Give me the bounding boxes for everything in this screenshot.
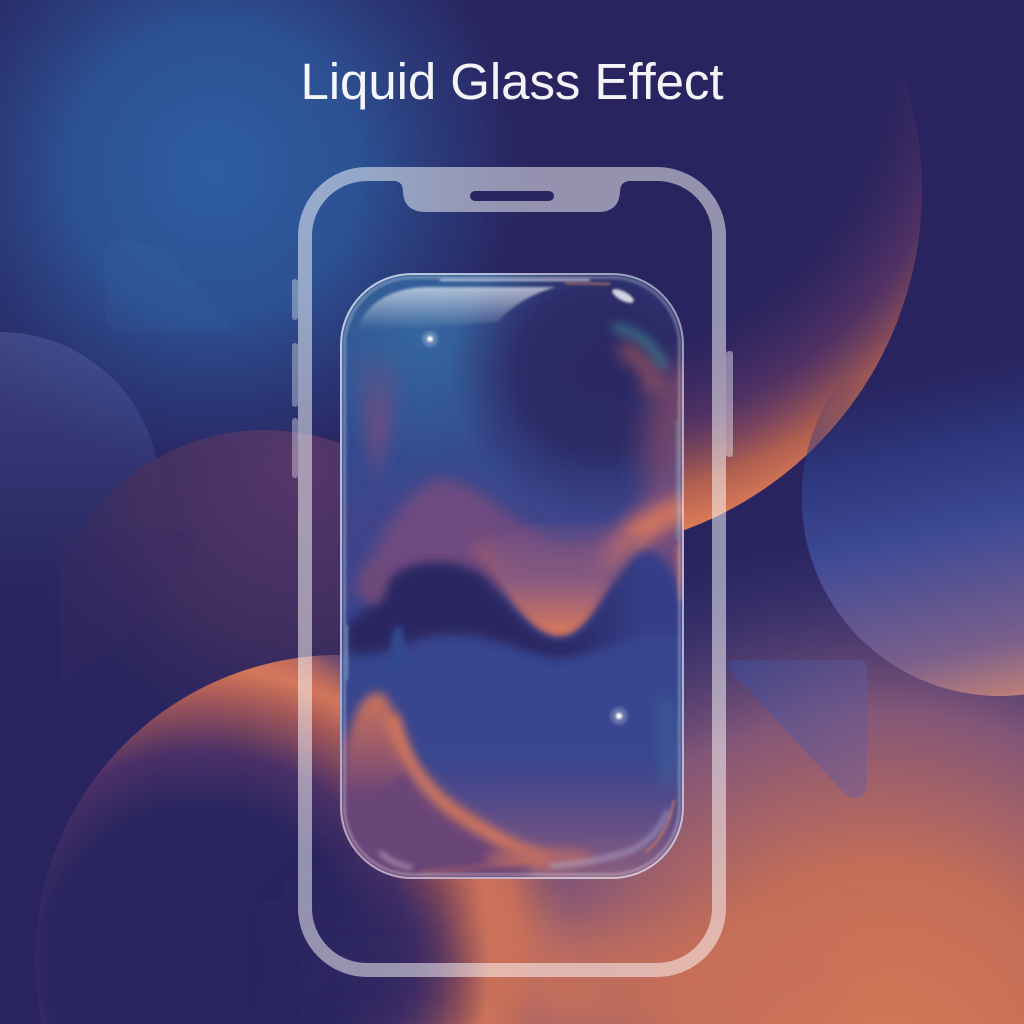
top-left faint triangle: [105, 238, 235, 332]
large orange-rimmed circle: [684, 92, 922, 530]
phone outline: [292, 174, 733, 970]
refracted contents: [340, 273, 720, 882]
top edge highlight: [440, 279, 590, 281]
purple finger: [360, 565, 386, 605]
phone frame: [305, 174, 719, 970]
muted top rim: [298, 655, 340, 694]
orange hump glow: [608, 505, 690, 572]
sparkle upper left: [420, 329, 440, 349]
inner glass rim: [344, 278, 680, 874]
dark refracted disc: [463, 273, 684, 500]
orange peak tent: [346, 693, 408, 794]
bottom-left glint: [380, 852, 412, 868]
purple wave band: [348, 455, 684, 598]
left teal accent: [346, 625, 348, 680]
side button middle left: [292, 343, 298, 407]
lower purple fade: [346, 777, 684, 879]
liquid glass panel: [340, 273, 720, 882]
top-left glossy highlight: [359, 285, 556, 327]
right teal glow: [664, 700, 669, 785]
glass rim: [341, 274, 683, 878]
bottom-right rainbow rim: [645, 800, 674, 853]
bottom-right orange glow: [300, 530, 1024, 1024]
rainbow arc teal: [612, 327, 664, 368]
right purple glow: [629, 349, 684, 499]
right edge orange sliver: [677, 545, 681, 600]
dark wave: [345, 551, 690, 658]
left purple streak: [356, 357, 400, 475]
bottom-right light rim: [550, 810, 668, 866]
side button lower left: [292, 418, 298, 478]
speaker: [470, 191, 554, 201]
orange tail: [485, 895, 585, 1022]
bottom-left dark circle with orange rim: [35, 655, 562, 1024]
top edge orange: [565, 283, 610, 284]
orange swirl: [392, 715, 548, 862]
bottom orange patch: [485, 848, 595, 868]
notch: [395, 181, 629, 212]
blue glow in glass: [346, 275, 476, 424]
side button upper left: [292, 279, 298, 320]
left dark panel shape: [60, 530, 200, 685]
side button right: [726, 351, 733, 457]
inner dark shadow: [300, 900, 450, 1024]
rainbow arc inner glow: [620, 348, 656, 392]
bottom orange streak: [420, 860, 530, 873]
title: Liquid Glass Effect: [300, 53, 724, 110]
orange left hump edge: [478, 545, 525, 610]
right translucent triangle: [728, 660, 867, 798]
lower-left purple area: [340, 731, 530, 882]
top-left blue glow: [0, 0, 560, 510]
right teal accent: [676, 420, 678, 540]
left purple circle: [45, 430, 485, 870]
orange tongue: [484, 525, 645, 637]
right blue circle: [802, 300, 1024, 696]
left translucent circle: [0, 332, 160, 652]
blue streak: [389, 624, 406, 654]
bottom orange wash: [540, 930, 840, 1024]
sparkle lower right: [608, 705, 630, 727]
top-right glint: [610, 286, 636, 306]
